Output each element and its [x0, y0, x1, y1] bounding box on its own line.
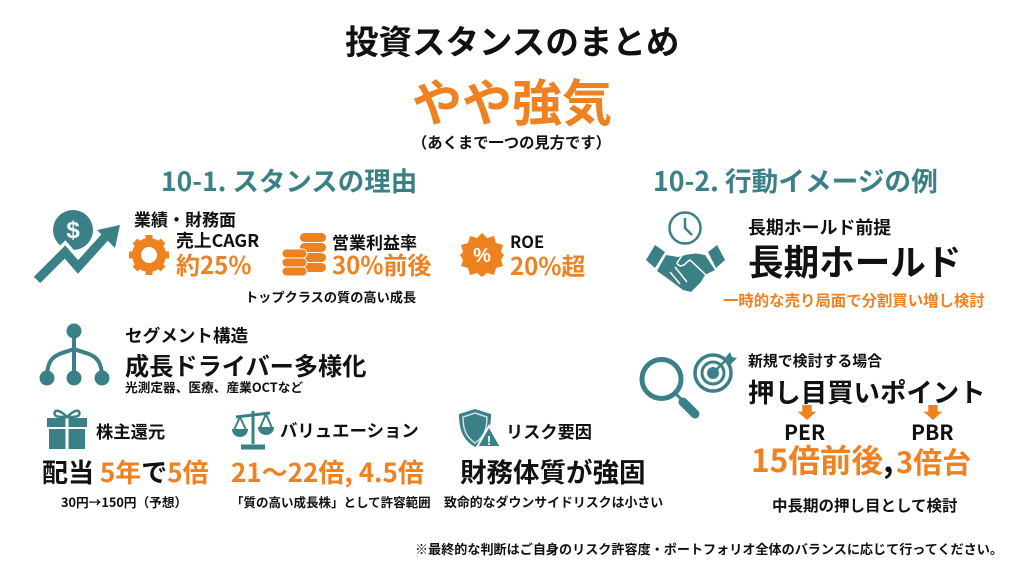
- metric label: 売上CAGR: [176, 227, 259, 253]
- icon: gear: [129, 235, 169, 275]
- label: 新規で検討する場合: 新規で検討する場合: [748, 350, 882, 371]
- value: PBR level: 3倍台: [896, 440, 971, 482]
- label: PER: PER: [784, 417, 825, 447]
- panel: new investment: [640, 350, 986, 516]
- metric: revenue CAGR: [176, 227, 259, 281]
- caption: dividend amounts: 30円→150円（予想）: [61, 492, 187, 511]
- headline: buy-on-dip points: 押し目買いポイント: [748, 371, 986, 410]
- metric label: 営業利益率: [332, 229, 417, 254]
- metric value: 約25%: [176, 246, 251, 281]
- metric: ROE: [510, 229, 585, 282]
- icon: shield warning: [459, 409, 500, 448]
- label: PBR: PBR: [911, 417, 954, 447]
- heading: 10-2: 10-2. 行動イメージの例: [653, 160, 938, 199]
- headline: dividend: 配当 5年で5倍: [42, 453, 209, 490]
- headline stance: やや強気: [412, 64, 612, 136]
- label: 株主還元: 株主還元: [96, 418, 165, 443]
- icon: dollar growth arrow: [34, 210, 120, 284]
- arrow: to PBR: [924, 405, 942, 420]
- icon: gift: [47, 410, 87, 449]
- headline: strong finances: 財務体質が強固: [460, 451, 646, 490]
- metric: operating margin: [332, 229, 431, 281]
- title: 投資スタンスのまとめ: [345, 15, 679, 64]
- heading: 10-1: 10-1. スタンスの理由: [161, 160, 417, 199]
- panel: valuation: [231, 411, 431, 511]
- icon: coins: [282, 233, 326, 276]
- panel: risk factors: [444, 409, 663, 511]
- icon: percent badge: %: [473, 245, 491, 267]
- caption: acceptable range: 「質の高い成長株」として許容範囲: [231, 492, 431, 511]
- icon: percent badge: [460, 233, 504, 277]
- label: バリュエーション: バリュエーション: [280, 418, 419, 443]
- metric value: 30%前後: [332, 246, 431, 281]
- label: 業績・財務面: 業績・財務面: [134, 206, 236, 231]
- value: PER level: 15倍前後,: [751, 436, 893, 482]
- label: リスク要因: リスク要因: [506, 418, 592, 443]
- caption: limited downside: 致命的なダウンサイドリスクは小さい: [444, 492, 663, 511]
- panel: performance and financials: [34, 206, 585, 306]
- icon: branching tree: [40, 324, 110, 386]
- icon: magnifier: [640, 357, 700, 418]
- panel: long-term hold: [646, 211, 985, 311]
- caption: examples: 光測定器、医療、産業OCTなど: [125, 377, 303, 396]
- icon: scales: [232, 411, 274, 450]
- stance note: （あくまで一つの見方です）: [412, 131, 611, 153]
- caption: add on dips: 一時的な売り局面で分割買い増し検討: [723, 289, 985, 311]
- arrow: to PER: [798, 405, 816, 420]
- metric value: 20%超: [510, 247, 585, 282]
- panel: segment structure: [40, 323, 366, 396]
- icon: shield warning: !: [487, 433, 491, 448]
- icon: dollar growth arrow: $: [66, 217, 80, 244]
- label: セグメント構造: セグメント構造: [125, 323, 248, 348]
- icon: clock and handshake: [646, 211, 725, 292]
- icon: target: [693, 352, 737, 393]
- metric label: ROE: [510, 229, 544, 253]
- headline: multiples: 21～22倍, 4.5倍: [231, 453, 424, 490]
- panel: shareholder returns: [42, 410, 209, 511]
- label: 長期ホールド前提: 長期ホールド前提: [748, 214, 891, 240]
- headline: growth drivers: 成長ドライバー多様化: [125, 347, 366, 382]
- headline: long-term hold: 長期ホールド: [748, 235, 961, 286]
- caption: top class growth: トップクラスの質の高い成長: [245, 287, 416, 306]
- caption: medium to long term: 中長期の押し目として検討: [772, 494, 958, 516]
- footnote: ※最終的な判断はご自身のリスク許容度・ポートフォリオ全体のバランスに応じて行ってください。: [415, 539, 1003, 558]
